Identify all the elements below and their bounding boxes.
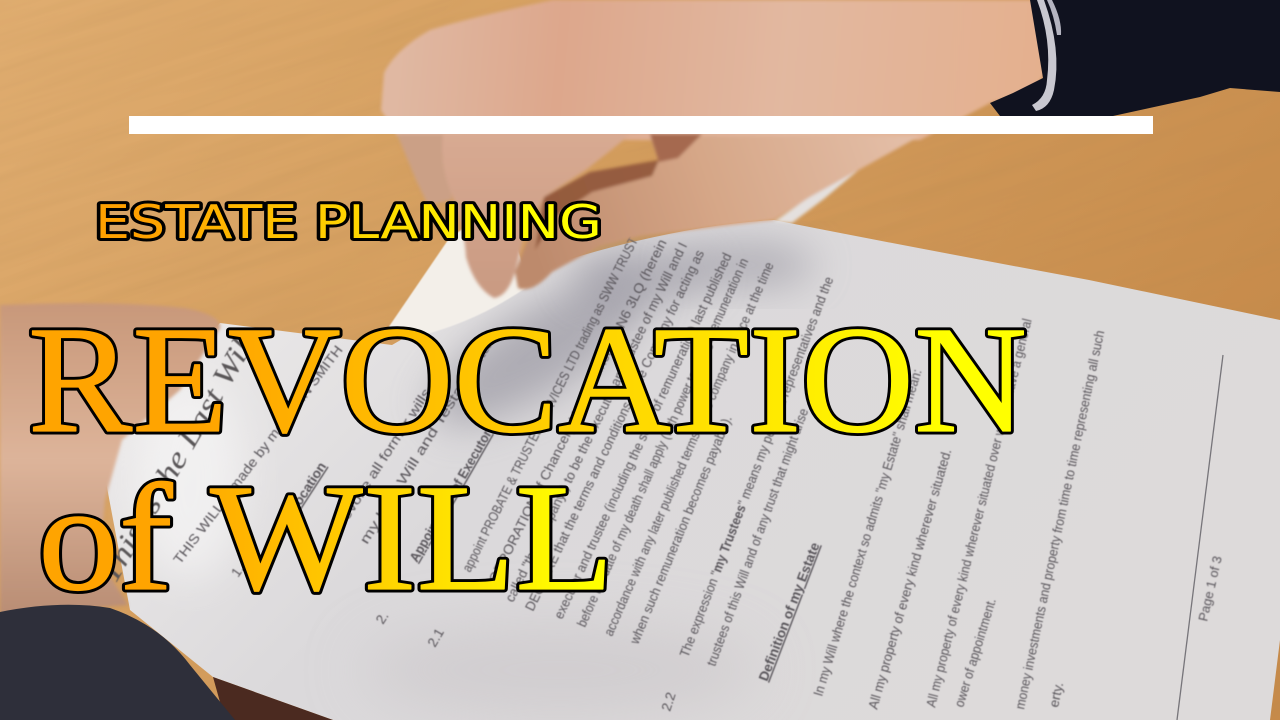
document text: THIS WILL is made by me JOHN SMITH xyxy=(170,343,346,567)
knitted sweater sleeve xyxy=(0,605,235,720)
subtitle: estate planning: ESTATE PLANNING xyxy=(95,195,602,249)
document text: All my property of every kind wherever situated. xyxy=(865,447,954,711)
document text: Appointment of Executor xyxy=(407,426,495,564)
title line 1: REVOCATION xyxy=(28,296,1027,465)
peeled paper corner xyxy=(388,200,530,335)
document text xyxy=(92,235,1225,713)
document text: The expression "my Trustees" means my personal representatives and the xyxy=(677,275,836,659)
back finger xyxy=(397,134,452,205)
document text: ower of appointment. xyxy=(952,596,999,709)
knuckle crease xyxy=(650,134,702,162)
document text: my Last Will and Testamentary xyxy=(357,326,502,547)
subtitle: estate planning: ESTATE PLANNING xyxy=(95,195,602,249)
will document page xyxy=(92,220,1280,720)
thumb shadow xyxy=(535,160,659,250)
document text: Page 1 of 3 xyxy=(1195,555,1225,623)
document text: 2.1 xyxy=(425,626,447,650)
title line 1: REVOCATION xyxy=(28,296,1027,465)
document text: money investments and property from time to time representing all such xyxy=(1012,329,1107,711)
dark desk corner xyxy=(213,677,333,720)
footer rule xyxy=(1177,355,1223,720)
document text: Definition of my Estate xyxy=(756,540,823,683)
document text: This is the Last Will xyxy=(92,325,264,588)
title line 2: of WILL xyxy=(38,454,614,623)
document text: accordance with any later published terms of the company in force at the time xyxy=(601,260,777,638)
document text: All my property of every kind wherever situated over which I have a general xyxy=(923,317,1035,709)
thumb xyxy=(515,136,920,289)
document text: 2.2 xyxy=(659,690,679,713)
document text: Revocation xyxy=(277,459,329,529)
left hand xyxy=(0,303,220,615)
title line 2: of WILL xyxy=(38,454,614,623)
document text: In my Will where the context so admits "my Estate" shall mean: xyxy=(811,367,925,698)
back of hand xyxy=(381,0,1045,140)
document text: 1. xyxy=(228,562,247,580)
document text: before the date of my death shall apply (with power to charge remuneration in xyxy=(574,256,751,629)
shirt cuff and dark sleeve xyxy=(990,0,1280,116)
index finger xyxy=(442,134,631,298)
paper edge behind thumb xyxy=(774,152,880,223)
hands at the top xyxy=(381,0,1045,298)
document text: appoint PROBATE & TRUSTEE SERVICES LTD trading as SWW TRUST xyxy=(459,235,641,574)
document text: DECLARE that the terms and conditions of the Company for acting as xyxy=(522,247,707,613)
document text: CORPORATION of Chancery House, Lincoln LN6 3LQ (herein xyxy=(481,237,670,594)
white bar xyxy=(129,116,1153,134)
document text: called "the Company") to be the executor and trustee of my Will and I xyxy=(502,240,690,604)
document text: executor and trustee (including the scale of remuneration) last published xyxy=(551,251,735,621)
document text: when such remuneration becomes payable). xyxy=(627,413,735,647)
document text: erty. xyxy=(1046,681,1066,709)
document text: trustees of this Will and of any trust that might arise xyxy=(704,406,811,668)
document text: I revoke all former wills and xyxy=(330,359,451,535)
document text: 2. xyxy=(373,609,392,627)
shadows on the page xyxy=(135,243,815,715)
main title xyxy=(28,296,1027,623)
